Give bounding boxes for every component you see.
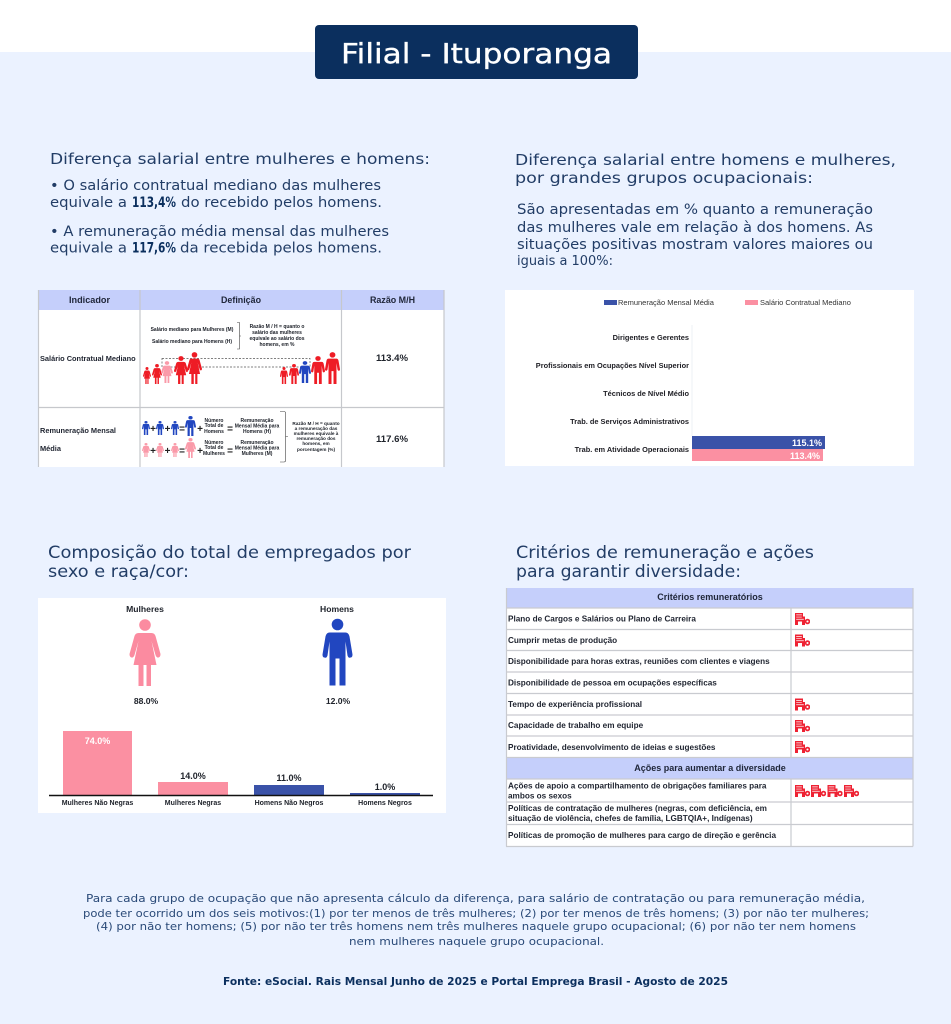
row: remuneração mensal média: Total de	[205, 423, 224, 429]
row: remuneração mensal média: homens, em	[302, 441, 330, 446]
column chart: Homens Não Negros	[255, 800, 324, 807]
text block: salary difference by occupational groups: situações positivas mostram valores maiores ou	[517, 237, 873, 253]
row: remuneração mensal média: Remuneração Mensal	[40, 426, 116, 435]
row: remuneração mensal média: Média	[40, 444, 62, 453]
row: remuneração mensal média: Mulheres	[203, 451, 225, 457]
heading: composition: sexo e raça/cor:	[48, 562, 189, 581]
row: salário contratual mediano: equivale ao salário dos	[249, 336, 305, 342]
text block: salary difference women and men	[50, 150, 430, 256]
icons: men formula	[142, 416, 196, 436]
text block: salary difference by occupational groups: São apresentadas em % quanto a remuneração	[517, 202, 873, 218]
criteria rows: Cumprir metas de produção	[508, 636, 617, 645]
panel: criteria and actions table	[506, 588, 913, 846]
row: remuneração mensal média: a remuneração das	[295, 426, 338, 431]
text block: salary difference by occupational groups: Diferença salarial entre homens e mulheres,	[515, 151, 896, 169]
row: salário contratual mediano: Razão M / H = quanto o	[250, 324, 304, 330]
footnote	[83, 892, 869, 948]
column chart: Mulheres Negras	[165, 800, 221, 807]
footnote: (4) por não ter homens; (5) por não ter três homens nem três mulheres naquele grupo ocupacional; (6) por não ter nem homens	[96, 920, 856, 933]
bars: 115.1%	[792, 438, 822, 448]
source: Fonte: eSocial. Rais Mensal Junho de 2025 e Portal Emprega Brasil - Agosto de 2025	[223, 975, 728, 988]
heading: criteria: para garantir diversidade:	[516, 562, 741, 581]
text block: salary difference women and men: • A remuneração média mensal das mulheres	[50, 224, 389, 240]
category labels: Dirigentes e Gerentes	[613, 333, 689, 342]
footnote: nem mulheres naquele grupo ocupacional.	[349, 935, 604, 948]
row: remuneração mensal média: =	[227, 446, 233, 457]
row: remuneração mensal média: Mulheres (M)	[242, 451, 273, 457]
row: remuneração mensal média: =	[179, 424, 185, 435]
legend: Remuneração Mensal Média	[618, 298, 715, 307]
row: salário contratual mediano: salário das mulheres	[252, 330, 302, 336]
row: salário contratual mediano: Salário mediano para Mulheres (M)	[151, 327, 234, 333]
text block: salary difference by occupational groups: das mulheres vale em relação à dos homens. As	[517, 220, 873, 236]
bars: 113.4%	[790, 451, 820, 461]
men pictogram: Homens	[320, 604, 354, 614]
row: remuneração mensal média: Total de	[205, 445, 224, 451]
criteria rows: Plano de Cargos e Salários ou Plano de Carreira	[508, 614, 696, 624]
row: remuneração mensal média: +	[165, 424, 171, 435]
row: remuneração mensal média: +	[197, 446, 203, 457]
panel: indicator definition table	[38, 290, 444, 467]
category labels: Trab. de Serviços Administrativos	[570, 417, 689, 426]
title: Filial - Ituporanga	[341, 37, 612, 70]
action rows: Políticas de promoção de mulheres para cargo de direção e gerência	[508, 831, 776, 840]
action rows: Políticas de contratação de mulheres (negras, com deficiência, em	[508, 804, 767, 813]
section heading: Critérios remuneratórios	[657, 592, 763, 602]
icons: criteria markers	[795, 613, 809, 753]
women pictogram	[126, 604, 164, 706]
row: salário contratual mediano: 113.4%	[376, 353, 408, 364]
women pictogram: 88.0%	[134, 696, 159, 706]
column chart: Mulheres Não Negras	[62, 800, 133, 807]
row: remuneração mensal média: +	[197, 424, 203, 435]
action rows: situação de violência, chefes de família, LGBTQIA+, Indígenas)	[508, 814, 753, 823]
icons: women formula	[142, 438, 196, 458]
row: salário contratual mediano: Salário mediano para Homens (H)	[152, 339, 232, 345]
icons: action markers	[795, 785, 858, 797]
panel: bar chart by occupational group	[505, 290, 914, 466]
row: remuneração mensal média: Remuneração	[240, 440, 274, 446]
row: salário contratual mediano	[40, 322, 408, 384]
row: remuneração mensal média: Número	[205, 440, 223, 446]
text block: salary difference women and men: equivale a	[50, 240, 127, 256]
row: remuneração mensal média: Razão M / H = quanto	[292, 421, 340, 426]
row: remuneração mensal média: +	[150, 424, 156, 435]
men pictogram	[320, 604, 354, 706]
icons: family men	[280, 352, 340, 384]
category labels: Trab. em Atividade Operacionais	[575, 445, 689, 454]
text block: salary difference women and men: Diferença salarial entre mulheres e homens:	[50, 150, 430, 168]
panel: workforce composition	[38, 598, 446, 813]
action rows	[508, 782, 776, 840]
criteria rows: Tempo de experiência profissional	[508, 700, 642, 709]
heading: criteria	[516, 543, 814, 581]
table header: Indicador	[69, 295, 110, 306]
women pictogram: Mulheres	[126, 604, 164, 614]
criteria rows: Disponibilidade de pessoa em ocupações específicas	[508, 678, 717, 688]
text block: salary difference women and men: • O salário contratual mediano das mulheres	[50, 178, 381, 194]
heading: criteria: Critérios de remuneração e ações	[516, 543, 814, 562]
row: remuneração mensal média	[40, 412, 408, 462]
row: remuneração mensal média: Remuneração	[240, 418, 274, 424]
column chart: Homens Negros	[358, 800, 412, 807]
column chart: 74.0%	[85, 736, 110, 746]
text block: salary difference women and men: do recebido pelos homens.	[181, 195, 382, 211]
row: salário contratual mediano: homens, em %	[259, 342, 295, 348]
text block: salary difference by occupational groups: iguais a 100%:	[517, 253, 613, 269]
row: remuneração mensal média: Homens (H)	[243, 429, 271, 435]
row: remuneração mensal média: Número	[205, 418, 223, 424]
text block: salary difference by occupational groups: por grandes grupos ocupacionais:	[515, 169, 813, 187]
icons: family women	[143, 352, 202, 384]
column chart: 11.0%	[276, 773, 302, 783]
footnote: pode ter ocorrido um dos seis motivos:(1) por ter menos de três mulheres; (2) por ter menos de três homens; (3) por não ter mulheres;	[83, 907, 869, 920]
men pictogram: 12.0%	[326, 696, 351, 706]
section heading: Ações para aumentar a diversidade	[634, 763, 786, 773]
column chart: 14.0%	[180, 771, 206, 781]
row: remuneração mensal média: Homens	[204, 429, 224, 435]
row: remuneração mensal média: remuneração dos	[296, 436, 336, 441]
row: remuneração mensal média: mulheres equivale à	[294, 431, 339, 436]
text block: salary difference women and men: 113,4%	[132, 195, 176, 211]
column chart	[49, 731, 433, 807]
row: remuneração mensal média: =	[227, 424, 233, 435]
column chart: 1.0%	[375, 782, 395, 792]
table header: Definição	[221, 295, 261, 306]
text block: salary difference women and men: 117,6%	[132, 240, 176, 256]
row: remuneração mensal média: +	[150, 446, 156, 457]
row: remuneração mensal média: porcentagem (%)	[297, 447, 335, 452]
criteria rows: Disponibilidade para horas extras, reuniões com clientes e viagens	[508, 657, 770, 666]
row: remuneração mensal média: Mensal Média para	[235, 446, 279, 452]
category labels: Profissionais em Ocupações Nível Superior	[536, 361, 689, 370]
category labels	[536, 333, 689, 454]
text block: salary difference by occupational groups	[515, 151, 896, 269]
text block: salary difference women and men: equivale a	[50, 195, 127, 211]
table header: Razão M/H	[370, 295, 415, 306]
action rows: Ações de apoio a compartilhamento de obrigações familiares para	[508, 782, 767, 790]
row: salário contratual mediano: Salário Contratual Mediano	[40, 354, 136, 363]
text block: salary difference women and men: da recebida pelos homens.	[180, 240, 382, 256]
legend	[604, 298, 851, 307]
criteria rows: Capacidade de trabalho em equipe	[508, 721, 644, 730]
title	[315, 25, 638, 79]
action rows: ambos os sexos	[508, 792, 572, 800]
row: remuneração mensal média: =	[179, 446, 185, 457]
heading: composition: Composição do total de empregados por	[48, 543, 411, 562]
bars	[692, 436, 825, 461]
criteria rows	[508, 614, 770, 752]
footnote: Para cada grupo de ocupação que não apresenta cálculo da diferença, para salário de contratação ou para remuneração média,	[86, 892, 865, 905]
heading: composition	[48, 543, 411, 581]
row: remuneração mensal média: +	[165, 446, 171, 457]
row: remuneração mensal média: 117.6%	[376, 434, 408, 445]
table header	[69, 295, 415, 306]
category labels: Técnicos de Nível Médio	[603, 389, 689, 398]
criteria rows: Proatividade, desenvolvimento de ideias e sugestões	[508, 743, 716, 752]
legend: Salário Contratual Mediano	[760, 298, 851, 307]
row: remuneração mensal média: Mensal Média para	[235, 424, 279, 430]
